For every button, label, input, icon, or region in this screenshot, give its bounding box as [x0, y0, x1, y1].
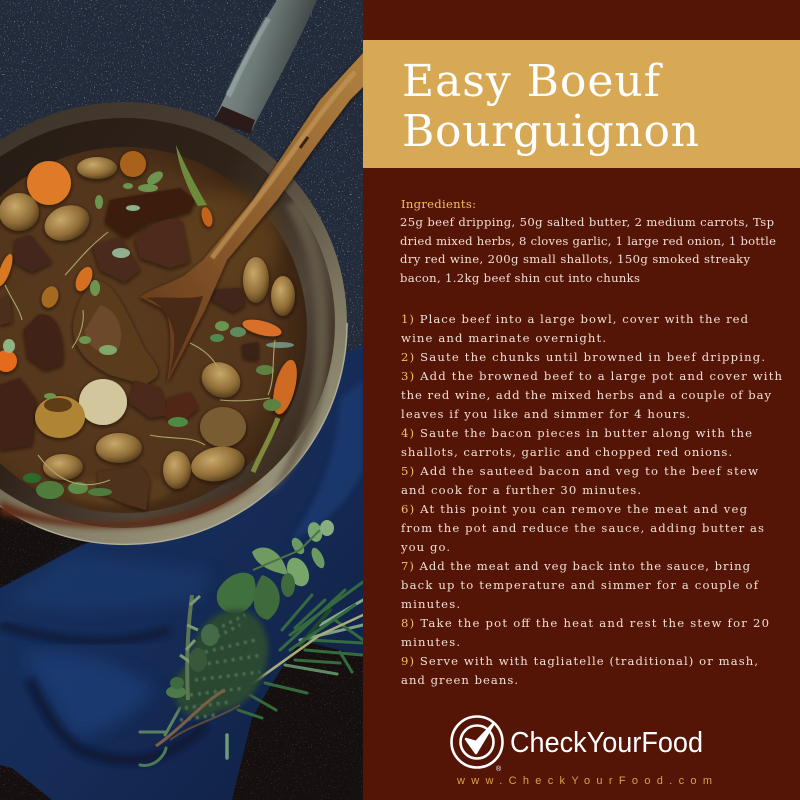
blue linen towel [0, 345, 363, 800]
herb stalk in stew [253, 418, 278, 472]
oregano leaves [217, 520, 334, 620]
title: Easy Boeuf [402, 56, 663, 107]
pan rim [0, 102, 347, 544]
ingredients block: dry red wine, 200g small shallots, 150g smoked streaky [400, 252, 750, 266]
icon: check mark badge: ® [496, 765, 502, 773]
ingredients block: bacon, 1.2kg beef shin cut into chunks [400, 271, 640, 285]
carrots [0, 151, 301, 417]
potatoes and mushrooms [0, 157, 295, 489]
stew sauce [0, 147, 307, 513]
method steps: from the pot and reduce the sauce, adding butter as [401, 521, 764, 535]
method steps: 4) Saute the bacon pieces in butter along with the [401, 426, 752, 440]
method steps: the red wine, add the mixed herbs and a couple of bay [401, 388, 771, 402]
dark table surface [0, 0, 363, 800]
thyme stems [5, 232, 275, 485]
spring onion [176, 145, 207, 206]
method steps: and cook for a further 30 minutes. [401, 483, 641, 497]
method steps: minutes. [401, 635, 460, 649]
website url: www.CheckYourFood.com [456, 775, 712, 787]
method steps: 7) Add the meat and veg back into the sauce, bring [401, 559, 751, 573]
food photograph [0, 0, 363, 800]
method steps: 3) Add the browned beef to a large pot and cover with [401, 369, 783, 383]
title banner [363, 40, 800, 168]
method steps: minutes. [401, 597, 460, 611]
method steps: you go. [400, 540, 450, 554]
beef chunks [0, 188, 258, 510]
fresh thyme garnish [3, 169, 294, 499]
method steps: shallots, carrots, garlic and chopped red onions. [401, 445, 732, 459]
method steps: back up to temperature and simmer for a couple of [401, 578, 759, 592]
method steps: 5) Add the sauteed bacon and veg to the beef stew [401, 464, 758, 478]
herb bundle [140, 520, 363, 765]
method steps: wine and marinate overnight. [401, 331, 606, 345]
right text panel [363, 0, 800, 800]
thyme bundle [156, 595, 281, 746]
icon: check mark badge [452, 716, 502, 773]
title [402, 56, 699, 157]
ingredients block [400, 197, 776, 285]
method steps: 6) At this point you can remove the meat and veg [401, 502, 748, 516]
method steps: 2) Saute the chunks until browned in beef dripping. [401, 350, 765, 364]
ingredients block: Ingredients: [401, 197, 476, 211]
method steps: 9) Serve with with tagliatelle (traditional) or mash, [401, 654, 758, 668]
pan inner wall [0, 118, 335, 528]
rosemary sprig [140, 582, 363, 765]
brand name: CheckYourFood [510, 727, 703, 759]
cooking pan [0, 53, 363, 544]
ingredients block: 25g beef dripping, 50g salted butter, 2 medium carrots, Tsp [400, 215, 774, 229]
CheckYourFood logo [452, 716, 712, 787]
method steps: 1) Place beef into a large bowl, cover with the red [401, 312, 749, 326]
method steps: and green beans. [401, 673, 518, 687]
vegetables [0, 151, 301, 489]
pan handle [214, 0, 317, 134]
method steps: leaves if you like and simmer for 4 hours. [401, 407, 690, 421]
wooden spoon [140, 53, 363, 383]
ingredients block: dried mixed herbs, 8 cloves garlic, 1 large red onion, 1 bottle [400, 234, 776, 248]
method steps: 8) Take the pot off the heat and rest the stew for 20 [401, 616, 769, 630]
method steps [400, 312, 783, 687]
title: Bourguignon [402, 106, 699, 157]
